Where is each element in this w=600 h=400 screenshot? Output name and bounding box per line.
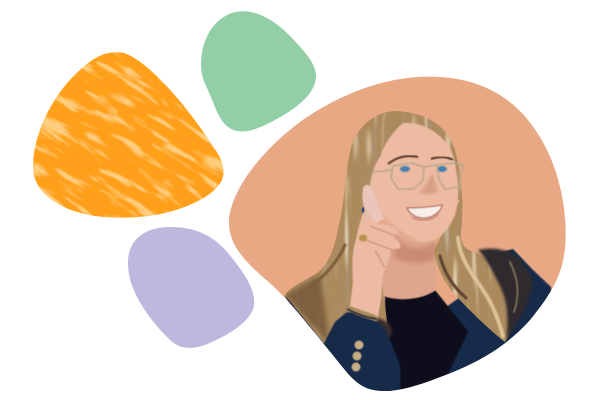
sleeve [323,312,400,400]
nail [362,207,364,213]
hand [350,212,401,316]
eyes [400,166,410,172]
woman on phone [280,105,553,400]
face shading [385,218,416,240]
blob: orange textured [32,52,224,218]
blob: green [201,11,316,131]
smile [407,205,442,218]
lower lip [412,214,438,220]
hair [285,111,510,344]
dark hair on shoulder [478,248,533,340]
dark hair near collar [375,316,392,339]
face [370,123,458,242]
phone [362,185,384,224]
bracelet [347,309,377,319]
eyebrows [388,156,418,164]
blob: peach with photo of woman on phone [228,76,566,391]
fingers shadow [366,226,396,268]
nose shadow [419,172,438,195]
buttons [354,340,364,350]
jacket [285,249,553,400]
jacket lapel [448,325,526,374]
darker lower-left hair [285,275,330,345]
neck and chest [383,234,436,300]
black top [385,290,500,392]
blob: purple [128,227,254,348]
hair strands [300,238,517,336]
neck shadow [394,236,436,263]
glasses [373,163,463,189]
ring [359,234,367,242]
peach background [228,76,566,391]
